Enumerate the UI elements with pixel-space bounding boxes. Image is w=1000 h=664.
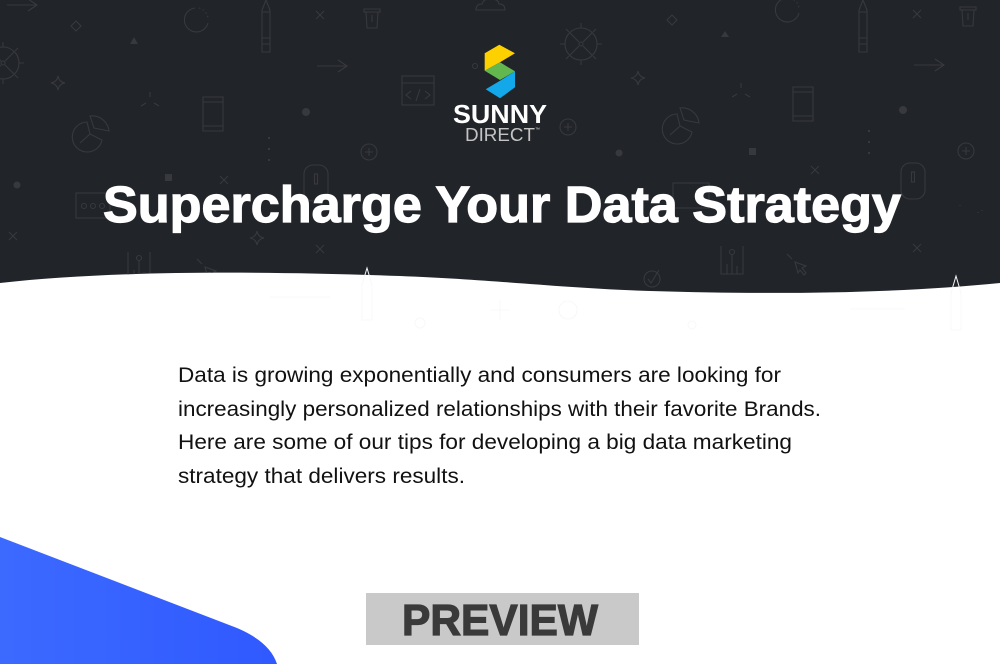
- intro paragraph: increasingly personalized relationships with their favorite Brands.: [178, 398, 821, 421]
- logo wordmark: SUNNY: SUNNY: [453, 99, 547, 129]
- title: Supercharge Your Data Strategy: [103, 176, 902, 233]
- background icon pattern: [0, 0, 982, 287]
- panel: dark header background: [0, 0, 1000, 293]
- intro paragraph: Here are some of our tips for developing a big data marketing: [178, 431, 792, 454]
- logo: Sunny Direct: [453, 45, 547, 145]
- logo mark: yellow segment: [485, 45, 515, 71]
- trademark symbol: ™: [535, 127, 540, 133]
- intro paragraph: Data is growing exponentially and consumers are looking for: [178, 364, 781, 387]
- badge background: [366, 593, 639, 645]
- decorative blue shape: [0, 537, 277, 664]
- logo mark: blue segment: [486, 71, 515, 98]
- faint icons on white: [270, 268, 961, 330]
- intro paragraph: [178, 364, 821, 488]
- badge label: PREVIEW: [402, 596, 598, 645]
- preview badge: [366, 593, 639, 645]
- intro paragraph: strategy that delivers results.: [178, 465, 465, 488]
- logo wordmark: DIRECT: DIRECT: [465, 125, 535, 145]
- logo mark: green segment: [485, 62, 515, 80]
